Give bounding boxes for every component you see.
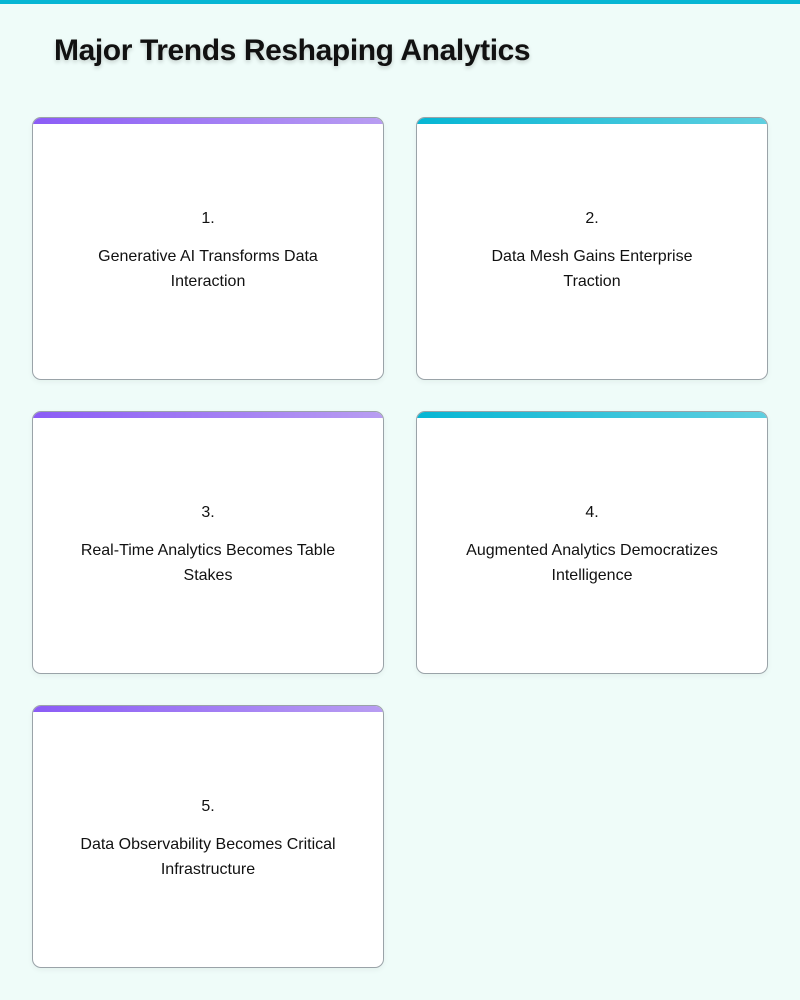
card 4: Augmented Analytics Democratizes Intelligence (466, 542, 718, 584)
card 3 (32, 411, 384, 674)
top accent bar (0, 0, 800, 4)
card 5: Data Observability Becomes Critical Infrastructure (80, 836, 336, 878)
title: Major Trends Reshaping Analytics (54, 34, 530, 67)
card 1: Generative AI Transforms Data Interaction (98, 248, 318, 290)
card 3: Real-Time Analytics Becomes Table Stakes (81, 542, 335, 584)
card 4: 4. (585, 504, 599, 521)
card 5 (32, 705, 384, 968)
card 4 (416, 411, 768, 674)
card 2 (416, 117, 768, 380)
card 2: 2. (585, 210, 599, 227)
card 1 (32, 117, 384, 380)
card 2: Data Mesh Gains Enterprise Traction (492, 248, 692, 290)
card 3: 3. (201, 504, 215, 521)
card 5: 5. (201, 798, 215, 815)
card 1: 1. (201, 210, 215, 227)
